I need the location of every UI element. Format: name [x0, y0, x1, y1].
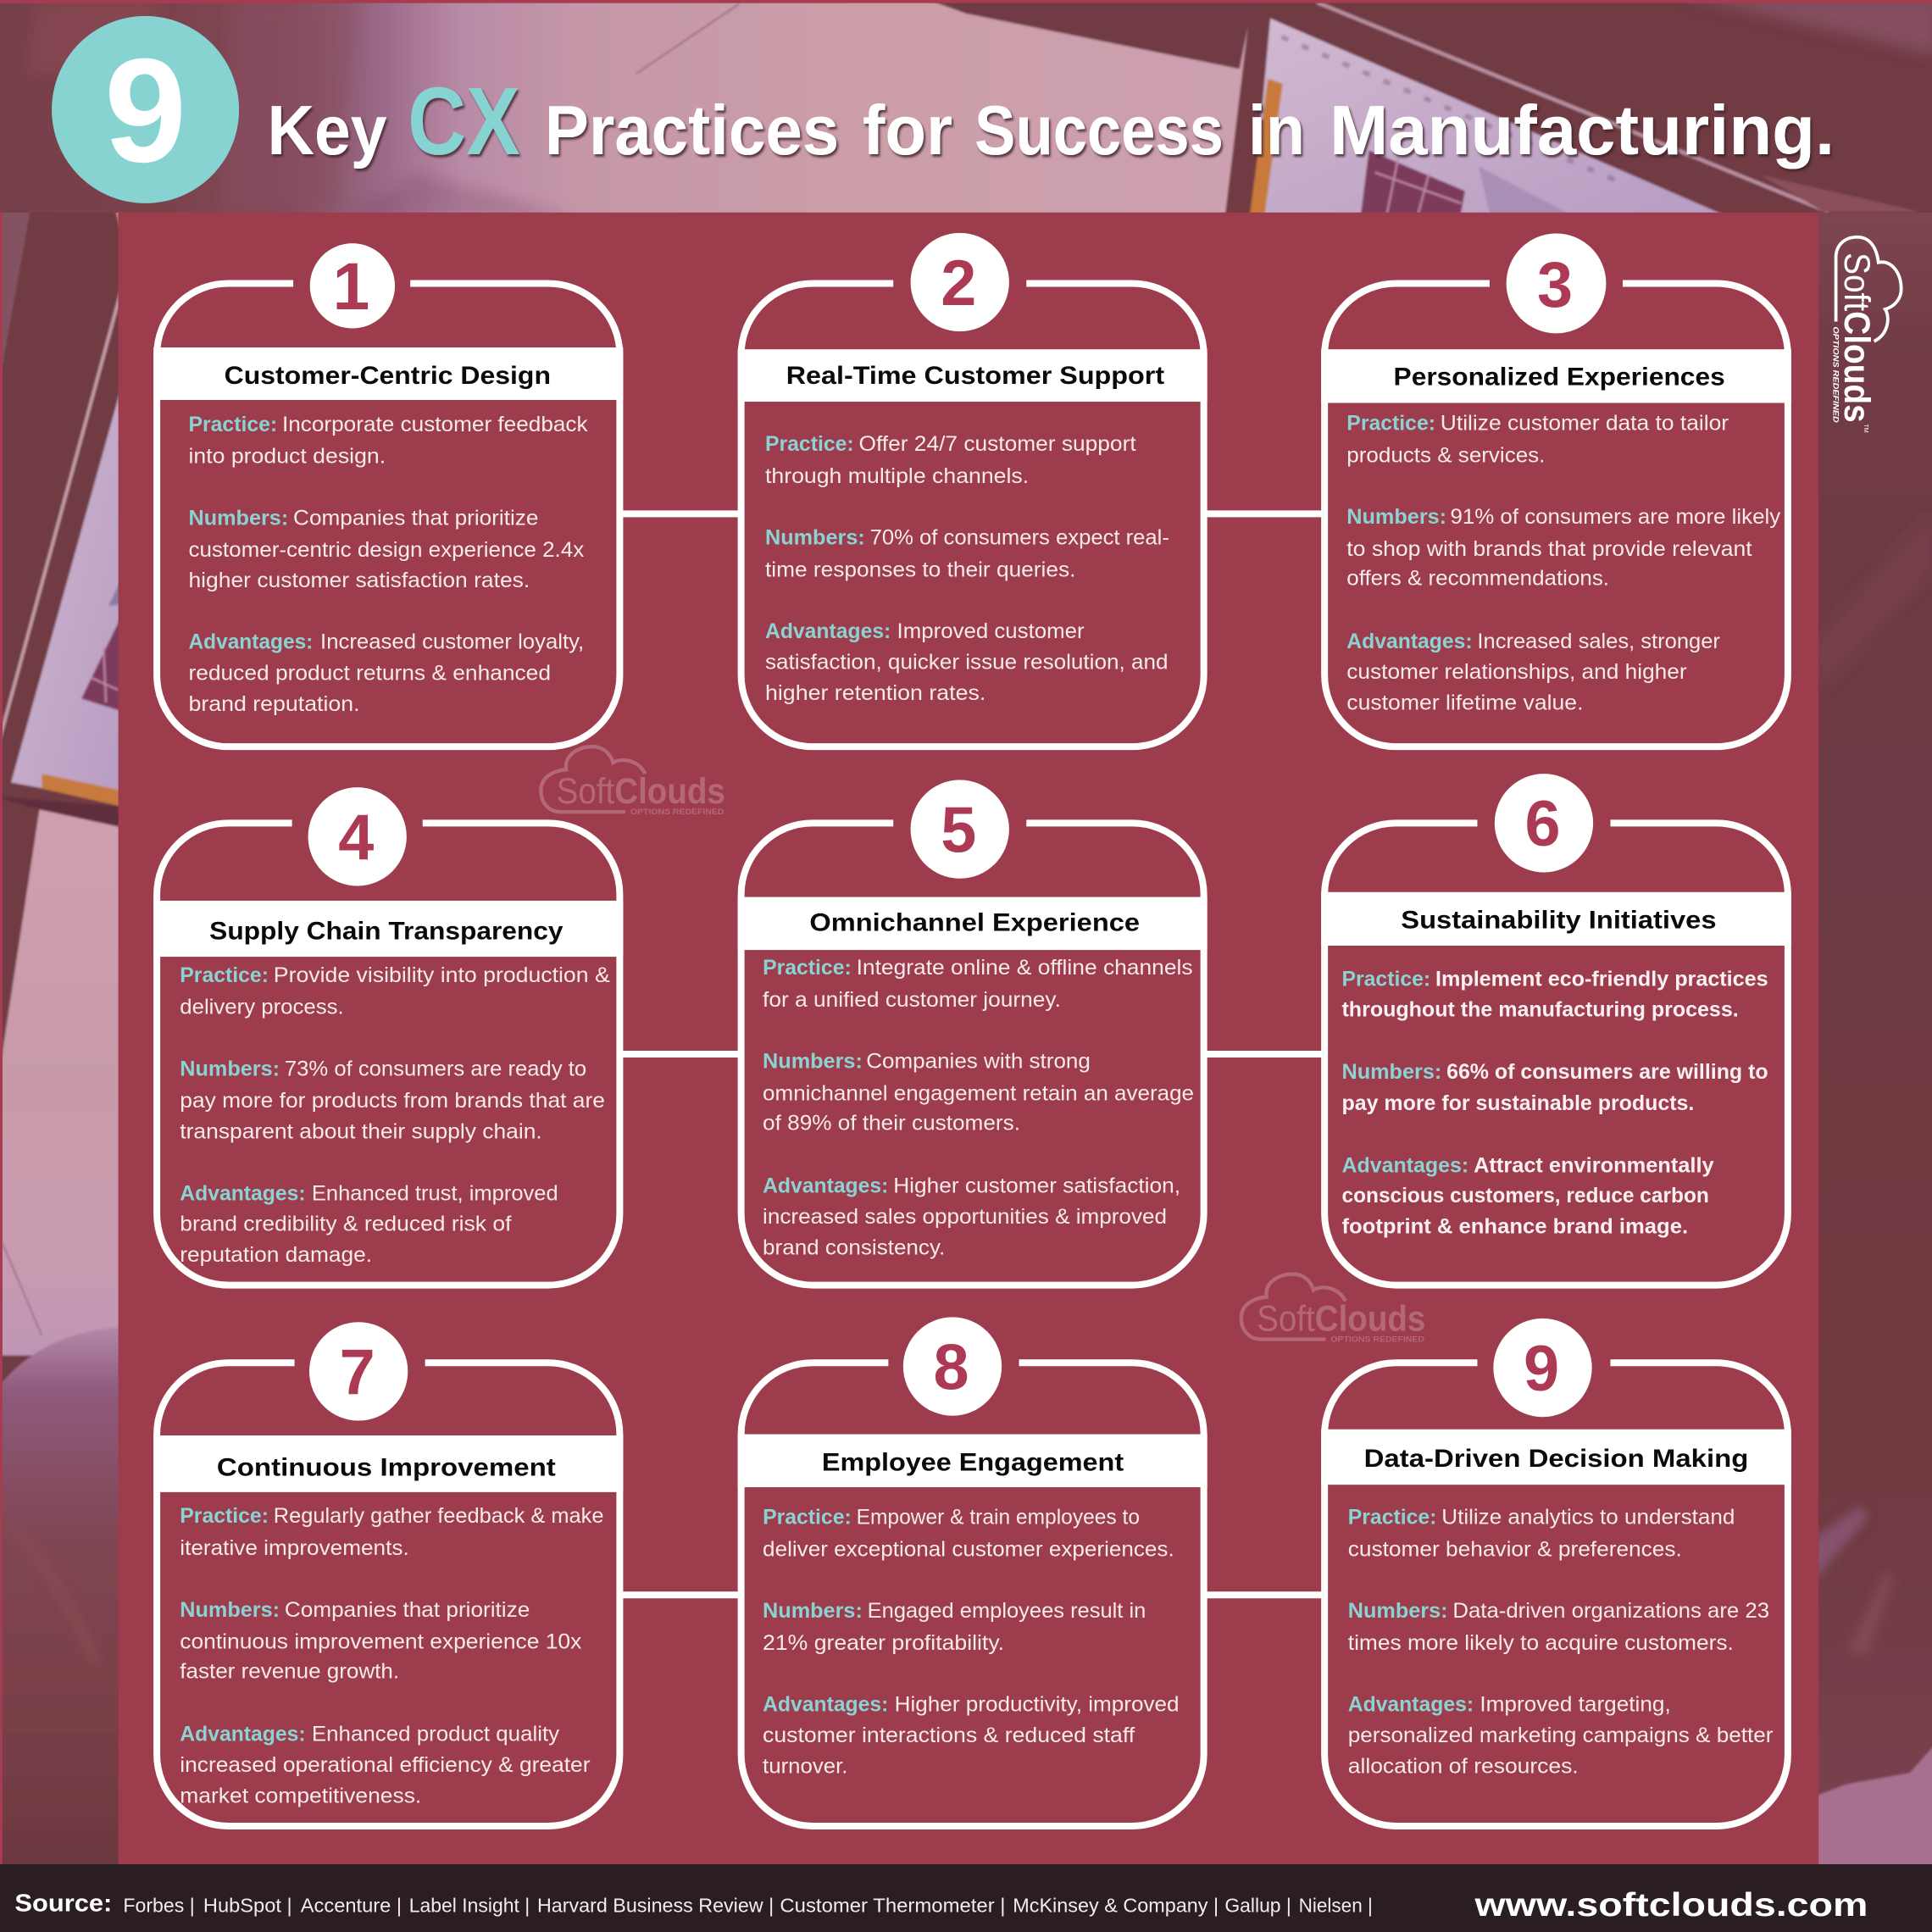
- number badge 1: [310, 243, 395, 329]
- numbers text: [763, 1599, 1146, 1655]
- card outline: [157, 1363, 619, 1826]
- number badge 5: 5: [941, 795, 976, 866]
- card 1: Customer-Centric Design: [153, 243, 623, 747]
- practice text: [180, 1504, 604, 1560]
- advantages text: market competitiveness.: [180, 1784, 421, 1807]
- numbers text: to shop with brands that provide relevant: [1346, 537, 1752, 561]
- number badge 8: [903, 1317, 1002, 1416]
- source list: Forbes |: [123, 1895, 195, 1917]
- numbers text: [1346, 505, 1781, 591]
- advantages text: Increased sales, stronger: [1477, 630, 1720, 653]
- numbers text: times more likely to acquire customers.: [1348, 1631, 1734, 1655]
- practice text: Practice:: [763, 956, 852, 980]
- advantages text: Improved customer: [897, 619, 1085, 643]
- advantages text: Advantages:: [1346, 630, 1473, 653]
- card title: Sustainability Initiatives: [1401, 907, 1717, 935]
- advantages text: allocation of resources.: [1348, 1754, 1579, 1778]
- big number badge: [52, 16, 239, 203]
- watermark logo lower right: [1241, 1274, 1425, 1344]
- card title: Personalized Experiences: [1394, 363, 1725, 391]
- card outline: [1324, 1363, 1788, 1826]
- SoftClouds logo: SoftClouds: [1837, 253, 1877, 423]
- numbers text: transparent about their supply chain.: [180, 1120, 542, 1144]
- source list: McKinsey & Company |: [1013, 1895, 1219, 1917]
- practice text: Practice:: [180, 963, 269, 987]
- source list: Harvard Business Review |: [537, 1895, 774, 1917]
- header band: [153, 1435, 623, 1492]
- practice text: Practice:: [1348, 1506, 1436, 1530]
- numbers text: Data-driven organizations are 23: [1452, 1599, 1769, 1623]
- advantages text: Enhanced product quality: [312, 1723, 560, 1746]
- source list: Accenture |: [301, 1895, 402, 1917]
- advantages text: [765, 619, 1168, 705]
- numbers text: Companies that prioritize: [293, 506, 538, 530]
- numbers text: Numbers:: [1346, 505, 1446, 529]
- advantages text: Advantages:: [1348, 1693, 1474, 1717]
- watermark logo centre: OPTIONS REDEFINED: [630, 808, 724, 817]
- numbers text: [180, 1598, 582, 1683]
- numbers text: Numbers:: [1341, 1060, 1441, 1084]
- watermark logo centre: SoftClouds: [557, 771, 725, 811]
- practice text: Incorporate customer feedback: [282, 413, 588, 436]
- advantages text: personalized marketing campaigns & better: [1348, 1724, 1773, 1747]
- advantages text: increased sales opportunities & improved: [763, 1205, 1167, 1229]
- card 9: Data-Driven Decision Making: [1321, 1319, 1791, 1826]
- card outline: [157, 823, 619, 1285]
- practice text: into product design.: [188, 445, 386, 469]
- advantages text: Higher productivity, improved: [895, 1693, 1180, 1717]
- advantages text: [1341, 1154, 1714, 1239]
- watermark logo centre: [541, 747, 725, 817]
- advantages text: [1348, 1693, 1773, 1778]
- main title: for: [863, 91, 952, 169]
- watermark logo lower right: OPTIONS REDEFINED: [1330, 1335, 1424, 1344]
- numbers text: offers & recommendations.: [1346, 567, 1609, 591]
- practice text: for a unified customer journey.: [763, 988, 1061, 1012]
- advantages text: reputation damage.: [180, 1243, 372, 1267]
- practice text: Utilize customer data to tailor: [1441, 411, 1729, 435]
- main red panel: [119, 213, 1818, 1864]
- card title: Continuous Improvement: [217, 1453, 556, 1481]
- advantages text: brand consistency.: [763, 1235, 945, 1259]
- card title: Customer-Centric Design: [225, 362, 551, 390]
- card 3: Personalized Experiences: [1321, 234, 1791, 747]
- practice text: products & services.: [1346, 443, 1545, 467]
- practice text: [765, 432, 1136, 488]
- numbers text: 73% of consumers are ready to: [285, 1057, 586, 1080]
- number badge 6: 6: [1524, 789, 1561, 860]
- advantages text: [180, 1181, 558, 1267]
- header band: [738, 349, 1208, 402]
- practice text: delivery process.: [180, 996, 344, 1019]
- main title: Success: [974, 91, 1224, 169]
- main title: Key: [268, 91, 387, 169]
- card 6: Sustainability Initiatives: [1321, 774, 1791, 1285]
- advantages text: reduced product returns & enhanced: [188, 662, 551, 686]
- numbers text: time responses to their queries.: [765, 558, 1075, 582]
- card outline: [1324, 283, 1788, 747]
- big number badge: 9: [104, 27, 186, 192]
- number badge 8: 8: [934, 1332, 969, 1403]
- header band: [738, 897, 1208, 950]
- header band: [1321, 349, 1791, 402]
- card outline: [157, 283, 619, 747]
- numbers text: Numbers:: [180, 1057, 280, 1080]
- numbers text: faster revenue growth.: [180, 1659, 399, 1683]
- practice text: Practice:: [188, 413, 277, 436]
- source label: Source:: [14, 1890, 112, 1917]
- advantages text: [188, 630, 584, 716]
- numbers text: 66% of consumers are willing to: [1446, 1060, 1768, 1084]
- main title: CX: [408, 68, 520, 175]
- card title: Supply Chain Transparency: [209, 918, 564, 946]
- practice text: customer behavior & preferences.: [1348, 1538, 1682, 1562]
- number badge 1: 1: [333, 249, 369, 324]
- practice text: Regularly gather feedback & make: [274, 1504, 603, 1528]
- card outline: [1324, 823, 1788, 1285]
- main title: in: [1248, 91, 1305, 169]
- card title: Employee Engagement: [822, 1448, 1124, 1476]
- number badge 6: [1495, 774, 1593, 872]
- advantages text: customer interactions & reduced staff: [763, 1724, 1135, 1747]
- practice text: [1348, 1506, 1735, 1562]
- practice text: Practice:: [1341, 967, 1430, 991]
- card title: Real-Time Customer Support: [786, 362, 1164, 390]
- source list: Customer Thermometer |: [780, 1895, 1006, 1917]
- advantages text: increased operational efficiency & greater: [180, 1753, 591, 1777]
- numbers text: [765, 526, 1169, 582]
- source list: HubSpot |: [203, 1895, 292, 1917]
- advantages text: customer relationships, and higher: [1346, 660, 1687, 684]
- numbers text: Engaged employees result in: [868, 1599, 1146, 1623]
- number badge 7: 7: [340, 1337, 375, 1408]
- main title: Manufacturing.: [1330, 91, 1835, 169]
- practice text: Utilize analytics to understand: [1441, 1506, 1735, 1530]
- advantages text: Advantages:: [763, 1693, 888, 1717]
- advantages text: Advantages:: [180, 1181, 306, 1205]
- advantages text: [763, 1693, 1180, 1778]
- number badge 5: [911, 780, 1009, 879]
- advantages text: [763, 1174, 1180, 1259]
- numbers text: higher customer satisfaction rates.: [188, 569, 530, 592]
- numbers text: [763, 1050, 1194, 1135]
- card 8: Employee Engagement: [738, 1317, 1208, 1826]
- numbers text: 21% greater profitability.: [763, 1631, 1004, 1655]
- card title: Data-Driven Decision Making: [1364, 1445, 1748, 1473]
- source list: Label Insight |: [409, 1895, 530, 1917]
- practice text: Empower & train employees to: [857, 1506, 1140, 1530]
- advantages text: Advantages:: [188, 630, 313, 654]
- card 2: Real-Time Customer Support: [738, 233, 1208, 747]
- card 4: Supply Chain Transparency: [153, 787, 623, 1285]
- left photo strip: [0, 207, 125, 1870]
- main title: [268, 68, 1835, 175]
- source list: [123, 1895, 1373, 1917]
- advantages text: [180, 1723, 591, 1807]
- watermark logo lower right: SoftClouds: [1257, 1298, 1425, 1338]
- website: www.softclouds.com: [1474, 1886, 1868, 1924]
- number badge 4: [308, 787, 407, 886]
- numbers text: Numbers:: [180, 1598, 280, 1622]
- practice text: Practice:: [763, 1506, 852, 1530]
- practice text: [188, 413, 588, 469]
- numbers text: Companies that prioritize: [285, 1598, 530, 1622]
- numbers text: omnichannel engagement retain an average: [763, 1081, 1194, 1105]
- card 5: Omnichannel Experience: [738, 780, 1208, 1285]
- practice text: Integrate online & offline channels: [857, 956, 1193, 980]
- header photo band: [0, 0, 1932, 218]
- advantages text: Attract environmentally: [1474, 1154, 1714, 1178]
- connector lines between cards: [619, 514, 1324, 1595]
- numbers text: 70% of consumers expect real-: [870, 526, 1169, 550]
- practice text: [1346, 411, 1729, 467]
- main title: Practices: [545, 91, 839, 169]
- practice text: [763, 1506, 1174, 1562]
- numbers text: customer-centric design experience 2.4x: [188, 538, 585, 562]
- SoftClouds logo: TM: [1863, 424, 1870, 433]
- advantages text: Advantages:: [765, 619, 891, 643]
- header band: [153, 901, 623, 957]
- card outline: [741, 823, 1204, 1285]
- practice text: Practice:: [1346, 411, 1435, 435]
- number badge 9: 9: [1524, 1334, 1559, 1405]
- source list: Nielsen |: [1299, 1895, 1373, 1917]
- advantages text: brand reputation.: [188, 692, 360, 716]
- advantages text: Advantages:: [763, 1174, 888, 1198]
- numbers text: Numbers:: [763, 1599, 863, 1623]
- advantages text: Enhanced trust, improved: [312, 1181, 558, 1205]
- advantages text: higher retention rates.: [765, 681, 985, 705]
- card title: Omnichannel Experience: [809, 909, 1140, 937]
- numbers text: Numbers:: [763, 1050, 863, 1074]
- footer bar: [0, 1864, 1932, 1932]
- practice text: Implement eco-friendly practices: [1435, 967, 1768, 991]
- practice text: iterative improvements.: [180, 1536, 409, 1560]
- advantages text: conscious customers, reduce carbon: [1341, 1184, 1709, 1208]
- SoftClouds logo: [1831, 237, 1901, 433]
- numbers text: [188, 506, 585, 592]
- practice text: [763, 956, 1193, 1012]
- numbers text: [1341, 1060, 1768, 1115]
- advantages text: customer lifetime value.: [1346, 691, 1583, 715]
- advantages text: Advantages:: [1341, 1154, 1468, 1178]
- advantages text: Higher customer satisfaction,: [893, 1174, 1180, 1198]
- numbers text: Numbers:: [765, 526, 865, 550]
- numbers text: 91% of consumers are more likely: [1450, 505, 1781, 529]
- numbers text: pay more for products from brands that are: [180, 1089, 605, 1113]
- advantages text: Increased customer loyalty,: [320, 630, 584, 654]
- source list: Gallup |: [1224, 1895, 1291, 1917]
- number badge 3: 3: [1537, 250, 1573, 321]
- practice text: [1341, 967, 1768, 1022]
- numbers text: continuous improvement experience 10x: [180, 1630, 582, 1654]
- number badge 2: [911, 233, 1009, 331]
- number badge 9: [1493, 1319, 1592, 1417]
- practice text: throughout the manufacturing process.: [1341, 998, 1739, 1022]
- numbers text: pay more for sustainable products.: [1341, 1091, 1694, 1115]
- advantages text: [1346, 630, 1720, 715]
- advantages text: Improved targeting,: [1480, 1693, 1671, 1717]
- numbers text: [1348, 1599, 1769, 1655]
- practice text: deliver exceptional customer experiences.: [763, 1538, 1174, 1562]
- header band: [1321, 892, 1791, 946]
- number badge 3: [1507, 234, 1606, 333]
- practice text: Practice:: [765, 432, 854, 456]
- practice text: Practice:: [180, 1504, 269, 1528]
- advantages text: footprint & enhance brand image.: [1341, 1215, 1688, 1239]
- advantages text: satisfaction, quicker issue resolution, and: [765, 651, 1168, 675]
- header band: [1321, 1430, 1791, 1485]
- card outline: [741, 283, 1204, 747]
- number badge 7: [309, 1322, 408, 1421]
- advantages text: Advantages:: [180, 1723, 306, 1746]
- SoftClouds logo: OPTIONS REDEFINED: [1831, 326, 1840, 423]
- card outline: [741, 1363, 1204, 1826]
- numbers text: [180, 1057, 605, 1144]
- practice text: through multiple channels.: [765, 464, 1029, 488]
- header band: [738, 1435, 1208, 1487]
- practice text: Offer 24/7 customer support: [858, 432, 1136, 456]
- number badge 4: 4: [338, 802, 374, 874]
- practice text: Provide visibility into production &: [274, 963, 610, 987]
- numbers text: Numbers:: [1348, 1599, 1448, 1623]
- right photo strip with logo: [1812, 207, 1932, 1870]
- practice text: [180, 963, 610, 1019]
- advantages text: turnover.: [763, 1754, 847, 1778]
- number badge 2: 2: [941, 248, 976, 319]
- numbers text: of 89% of their customers.: [763, 1111, 1020, 1135]
- advantages text: brand credibility & reduced risk of: [180, 1213, 511, 1236]
- numbers text: Numbers:: [188, 506, 288, 530]
- header band: [153, 347, 623, 400]
- card 7: Continuous Improvement: [153, 1322, 623, 1826]
- numbers text: Companies with strong: [866, 1050, 1091, 1074]
